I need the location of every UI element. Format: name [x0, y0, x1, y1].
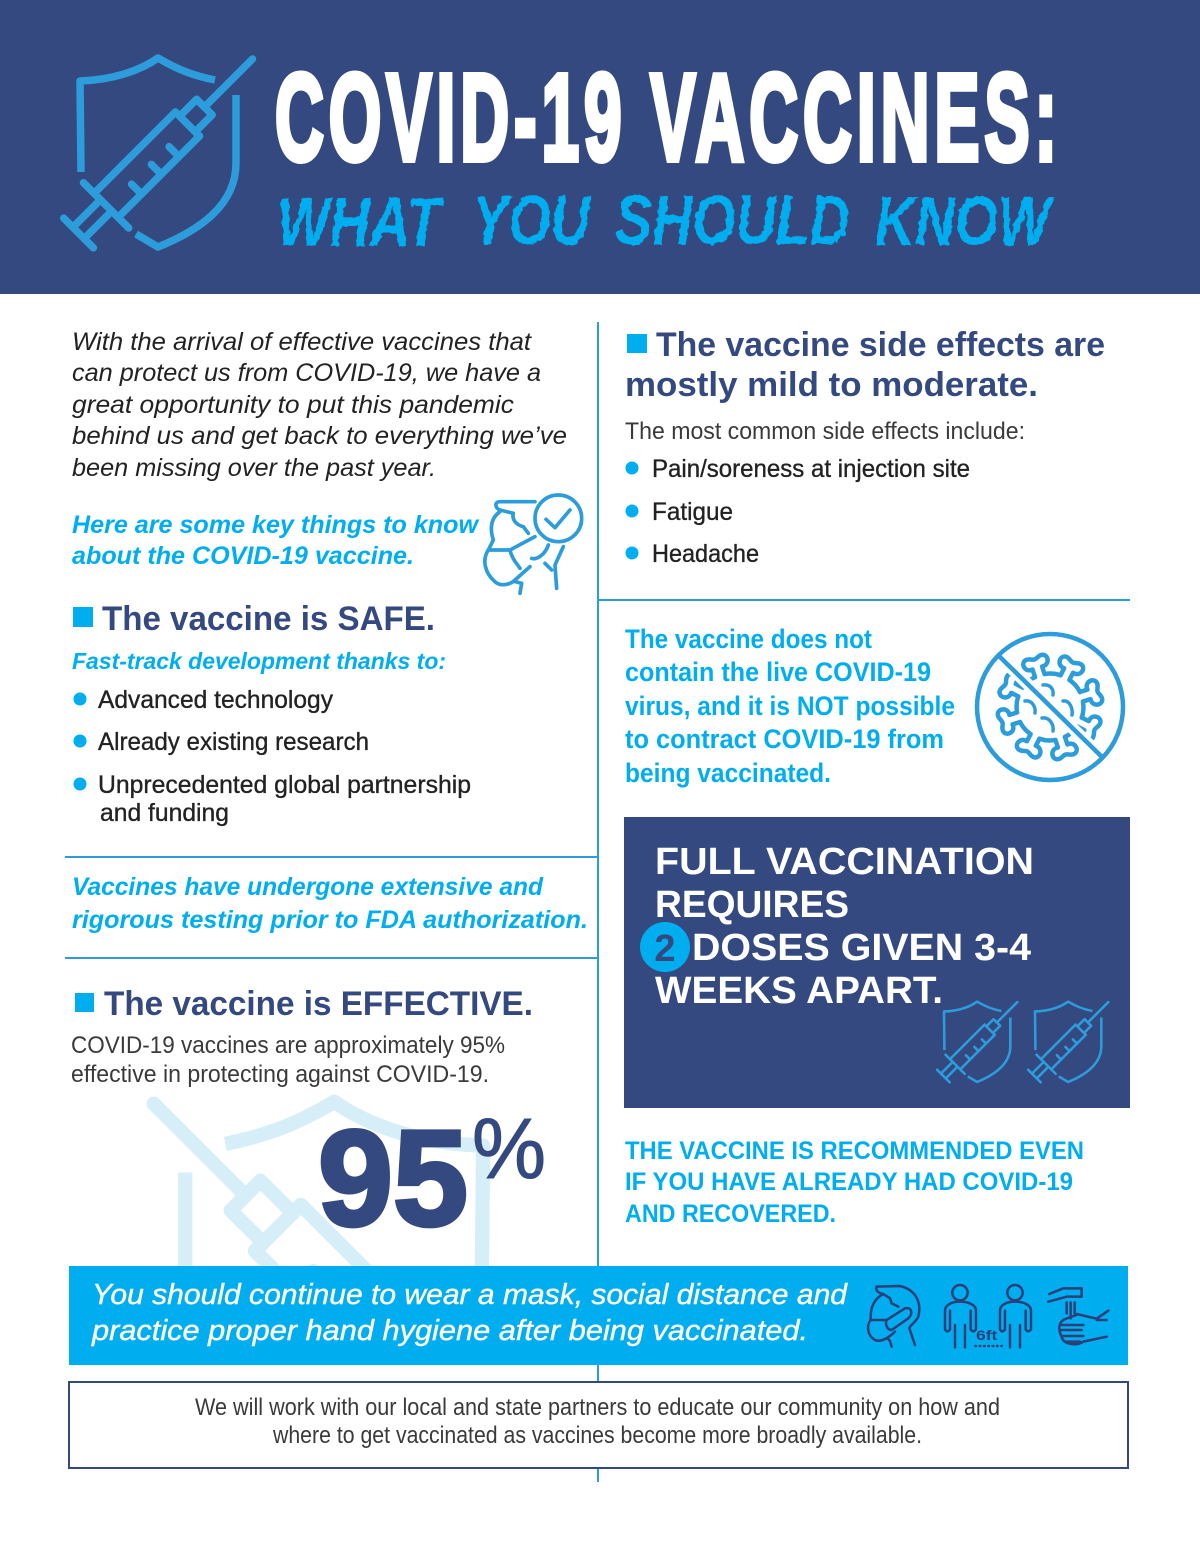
bullet list: development reasons: and funding: [100, 799, 229, 827]
icon: second dose shield: [1025, 992, 1118, 1086]
callout: recommended after recovery: THE VACCINE IS RECOMMENDED EVEN: [625, 1137, 1084, 1165]
callout: no live virus: being vaccinated.: [625, 758, 831, 788]
callout: recommended after recovery: IF YOU HAVE ALREADY HAD COVID-19: [625, 1168, 1073, 1196]
big number: 95 percent: [318, 1102, 546, 1254]
heading: side effects: mostly mild to moderate.: [625, 366, 1038, 404]
subtitle: WHAT: [277, 183, 444, 261]
icon: first dose shield: [934, 992, 1027, 1086]
intro paragraph: With the arrival of effective vaccines that: [72, 328, 532, 356]
column divider: [597, 322, 599, 1482]
panel: vaccine is safe: [72, 600, 471, 827]
icon: face mask: [868, 1286, 919, 1347]
key things callout: about the COVID-19 vaccine.: [72, 542, 414, 570]
callout: rigorous testing: rigorous testing prior to FDA authorization.: [72, 906, 588, 934]
banner: continue precautions: practice proper hand hygiene after being vaccinated.: [91, 1315, 808, 1347]
key things callout: Here are some key things to know: [72, 511, 480, 539]
panel: full vaccination: FULL VACCINATION: [655, 841, 1034, 883]
heading: side effects: [625, 326, 1105, 404]
panel: side effects: [598, 326, 1130, 600]
watermark: shield and syringe: [146, 1094, 490, 1266]
bullet list: development reasons: Unprecedented global partnership: [98, 771, 471, 799]
callout: recommended after recovery: AND RECOVERED.: [625, 1200, 836, 1228]
callout: no live virus: [625, 624, 955, 788]
subtitle: SHOULD: [615, 181, 850, 259]
bullet list: side effects: Headache: [652, 540, 759, 568]
bullet list: side effects: Fatigue: [652, 498, 733, 526]
bullet list: development reasons: [74, 686, 471, 827]
bullet list: development reasons: Already existing research: [98, 728, 369, 756]
bullet list: development reasons: Advanced technology: [98, 686, 333, 714]
icon: six feet distance: [945, 1285, 1031, 1347]
big number: 95 percent: %: [472, 1102, 546, 1197]
subtitle: [277, 181, 1055, 261]
note box: local partners: where to get vaccinated as vaccines become more broadly available.: [272, 1422, 922, 1449]
intro paragraph: been missing over the past year.: [72, 454, 436, 482]
intro paragraph: behind us and get back to everything we’ve: [72, 422, 567, 450]
intro paragraph: great opportunity to put this pandemic: [72, 391, 515, 419]
bullet list: side effects: [626, 455, 970, 568]
icon: hand washing: [1048, 1288, 1108, 1344]
big number: 95 percent: 95: [318, 1102, 468, 1254]
note box: local partners: [69, 1382, 1128, 1468]
callout: no live virus: The vaccine does not: [625, 624, 872, 654]
callout: rigorous testing: [65, 857, 598, 958]
panel: full vaccination: WEEKS APART.: [655, 970, 943, 1012]
effectiveness text: [71, 1032, 505, 1088]
callout: no live virus: to contract COVID-19 from: [625, 724, 944, 754]
subheading: fast-track: Fast-track development thanks to:: [72, 648, 446, 674]
callout: no live virus: contain the live COVID-19: [625, 657, 931, 687]
icon: crossed-out virus: [977, 634, 1123, 780]
effectiveness text: COVID-19 vaccines are approximately 95%: [71, 1032, 505, 1059]
heading: effective: The vaccine is EFFECTIVE.: [104, 985, 533, 1023]
icon: shield with syringe: [56, 36, 275, 256]
callout: no live virus: virus, and it is NOT possible: [625, 691, 955, 721]
number badge: 2: 2: [654, 928, 676, 970]
panel: full vaccination: REQUIRES: [655, 884, 849, 926]
panel: full vaccination: DOSES GIVEN 3-4: [692, 927, 1031, 969]
key things callout: [72, 511, 480, 570]
subtitle: YOU: [472, 181, 591, 259]
panel: vaccine is effective: [72, 990, 544, 1266]
callout: rigorous testing: Vaccines have undergone extensive and: [72, 873, 544, 901]
panel: full vaccination: [624, 817, 1130, 1108]
side effects intro: The most common side effects include:: [625, 418, 1025, 445]
intro paragraph: can protect us from COVID-19, we have a: [72, 359, 541, 387]
note box: local partners: We will work with our local and state partners to educate our community on how and: [195, 1394, 1000, 1421]
subtitle: KNOW: [875, 182, 1055, 260]
banner: continue precautions: [69, 1266, 1128, 1365]
callout: recommended after recovery: [625, 1137, 1084, 1228]
effectiveness text: effective in protecting against COVID-19.: [71, 1061, 489, 1088]
heading: side effects: The vaccine side effects are: [656, 326, 1105, 364]
icon: six feet distance: 6ft: [976, 1327, 998, 1343]
bullet list: side effects: Pain/soreness at injection site: [652, 455, 970, 483]
number badge: 2: [640, 922, 690, 972]
icon: masked head with check mark: [485, 495, 582, 593]
banner: continue precautions: You should continue to wear a mask, social distance and: [92, 1279, 848, 1311]
heading: safe: The vaccine is SAFE.: [102, 600, 435, 638]
intro paragraph: [72, 328, 567, 482]
header banner: [0, 0, 1200, 294]
